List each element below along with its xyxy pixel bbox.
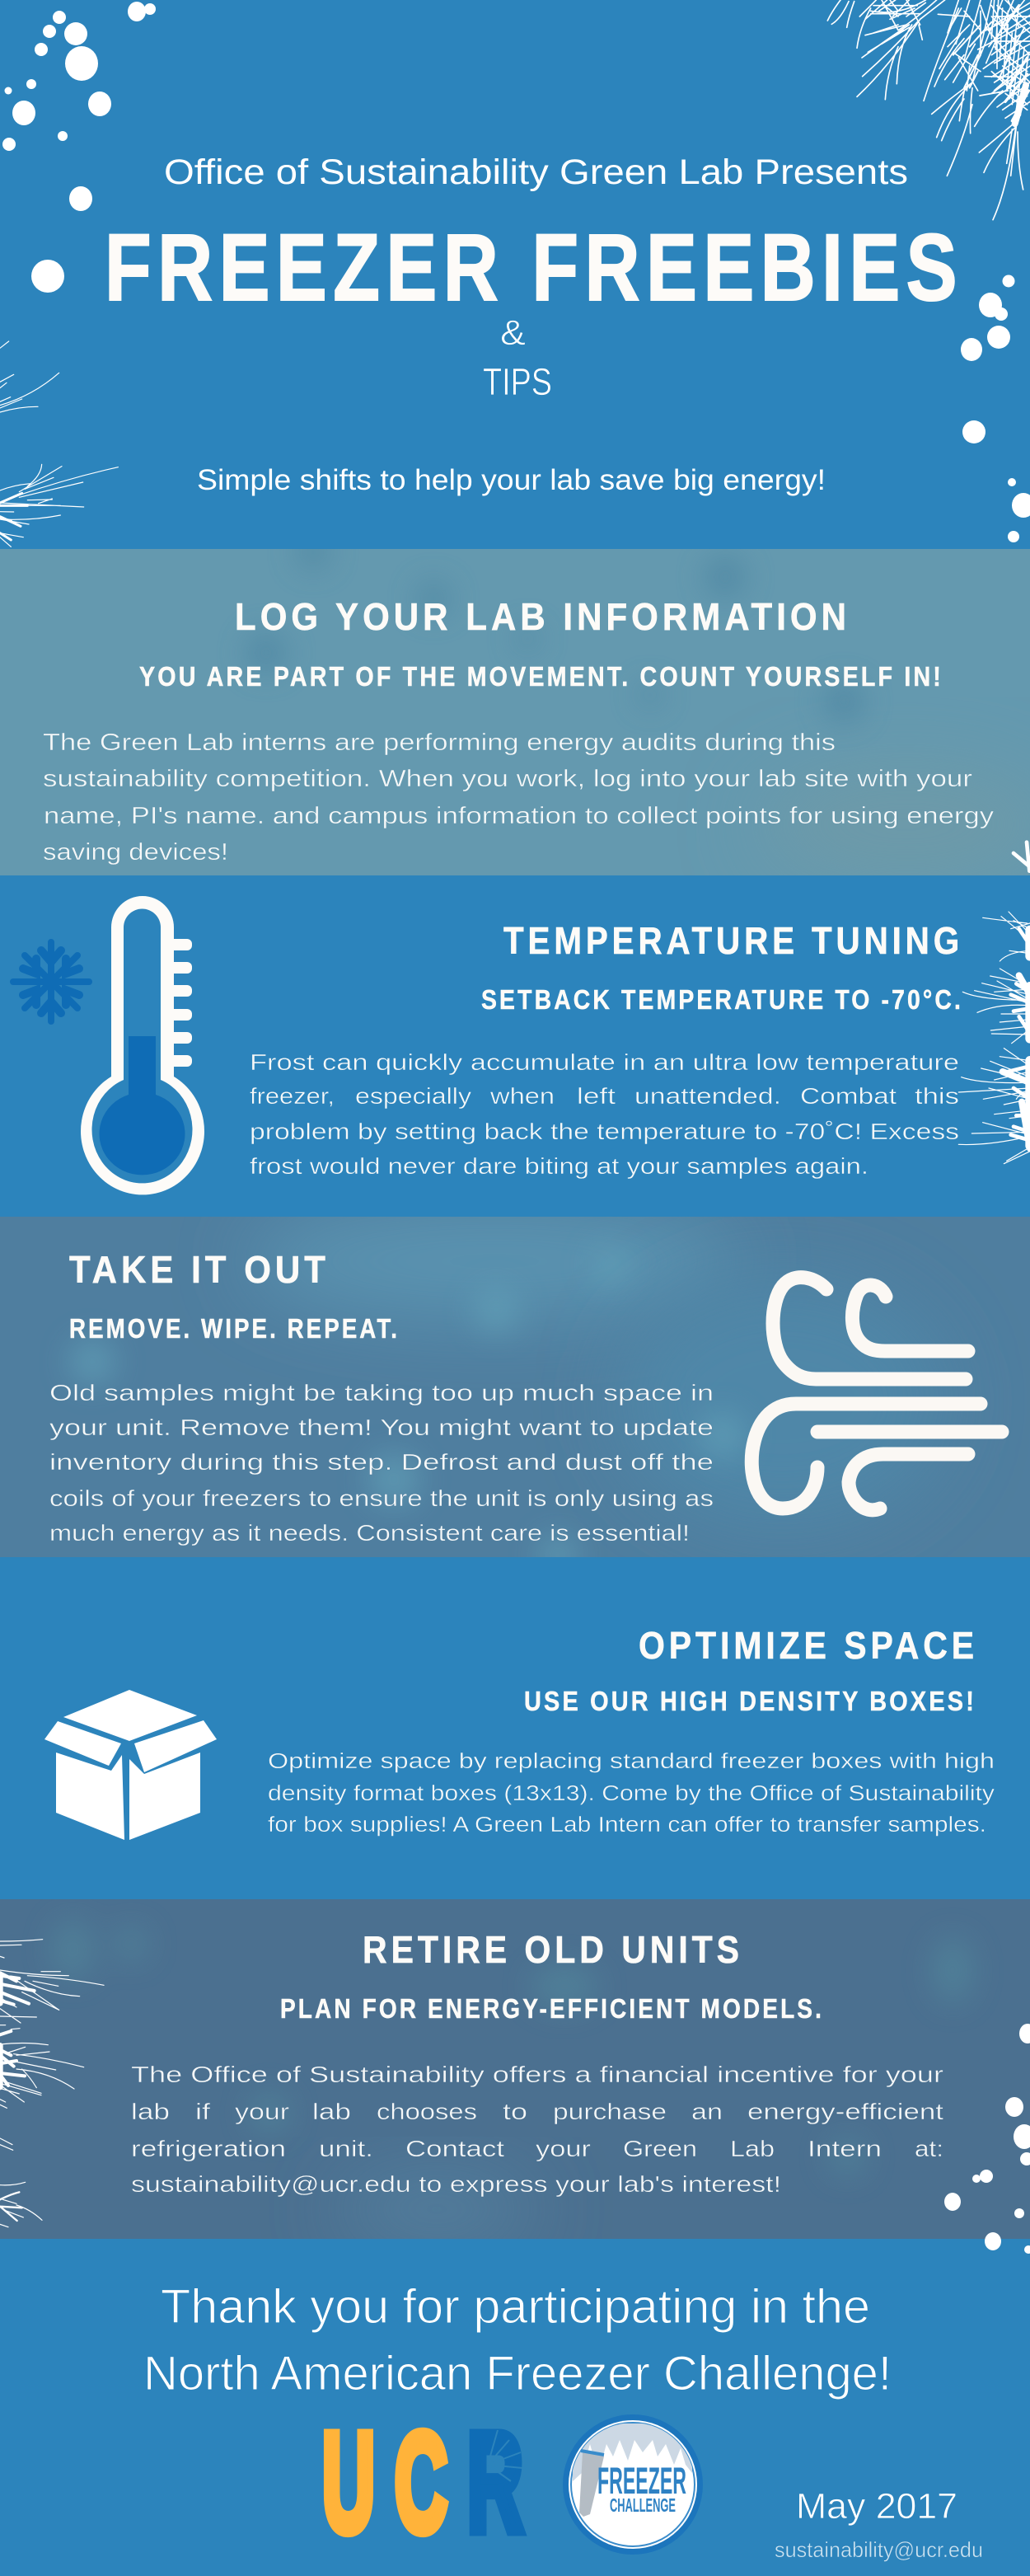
body text: The Green Lab interns are performing energy audits during this [43, 730, 836, 756]
pine branches: left edge [0, 1940, 104, 2227]
subheading: PLAN FOR ENERGY-EFFICIENT MODELS. [280, 1993, 824, 2024]
body text: Optimize space by replacing standard freezer boxes with high [268, 1750, 995, 1773]
body text [131, 2062, 943, 2197]
body text: frost would never dare biting at your samples again. [250, 1153, 868, 1179]
body text: purchase [553, 2099, 667, 2124]
logo: freezer challenge badge: CHALLENGE [610, 2494, 676, 2516]
pine branch: left [0, 341, 118, 547]
body text: coils of your freezers to ensure the unit is only using as [49, 1485, 714, 1511]
body text [49, 1380, 714, 1546]
body text: sustainability competition. When you work, log into your lab site with your [43, 766, 972, 792]
body text: when [489, 1083, 555, 1109]
snow dots: top left [2, 2, 156, 293]
body text: The Office of Sustainability offers a financial incentive for your [131, 2062, 943, 2087]
logo: UCR: C [395, 2405, 447, 2561]
body text: inventory during this step. Defrost and dust off the [49, 1449, 714, 1475]
body text: energy-efficient [747, 2099, 943, 2124]
snow dots: right [961, 275, 1030, 542]
panel: retire old units [0, 1899, 1030, 2254]
icon: snowflake [13, 942, 89, 1021]
body text: unit. [319, 2136, 373, 2161]
panel: take it out [0, 1204, 1030, 1575]
body text: refrigeration [131, 2136, 286, 2161]
body text: Intern [808, 2136, 882, 2161]
pine branches: right edge [958, 842, 1030, 1164]
body text: your unit. Remove them! You might want to update [49, 1415, 714, 1440]
subtitle: presenter: Office of Sustainability Green Lab Presents [164, 152, 908, 192]
body text [250, 1049, 959, 1179]
thank you message: Thank you for participating in the [161, 2280, 870, 2334]
body text: left [577, 1083, 616, 1109]
body text: your [536, 2136, 591, 2161]
icon: thermometer [81, 896, 204, 1194]
body text: problem by setting back the temperature to -70˚C! Excess [250, 1119, 959, 1144]
body text: Green [623, 2136, 697, 2161]
icon: wind [751, 1278, 1002, 1510]
body text [268, 1750, 995, 1837]
heading: LOG YOUR LAB INFORMATION [235, 595, 850, 638]
body text: at: [915, 2136, 943, 2161]
subheading: SETBACK TEMPERATURE TO -70°C. [481, 984, 963, 1015]
tube [579, 2452, 604, 2517]
body text: much energy as it needs. Consistent care is essential! [49, 1520, 690, 1546]
body text: freezer, [250, 1083, 335, 1109]
body text: Combat [800, 1083, 897, 1109]
body text: this [915, 1083, 959, 1109]
body text: saving devices! [43, 839, 228, 866]
logo: UCR [322, 2405, 523, 2561]
logo: UCR: U [322, 2405, 375, 2561]
panel: temperature tuning [13, 842, 1030, 1194]
logo: UCR: R [467, 2405, 523, 2561]
badge wordmark: FREEZER [597, 2460, 686, 2502]
snow dots [944, 2024, 1030, 2254]
body text: for box supplies! A Green Lab Intern can offer to transfer samples. [268, 1814, 986, 1837]
heading: TEMPERATURE TUNING [503, 919, 963, 962]
body text: an [691, 2099, 723, 2124]
body text: name, PI's name. and campus information to collect points for using energy [44, 803, 995, 829]
ampersand: & [500, 313, 526, 353]
body text: Lab [730, 2136, 775, 2161]
contact email: sustainability@ucr.edu [775, 2537, 983, 2562]
icicles [573, 2424, 692, 2481]
thank you message [143, 2280, 892, 2400]
body text: lab [312, 2099, 351, 2124]
heading: RETIRE OLD UNITS [363, 1928, 743, 1971]
body text: lab [131, 2099, 170, 2124]
body text: Contact [405, 2136, 504, 2161]
date: May 2017 [796, 2486, 957, 2527]
logo: freezer challenge badge [563, 2414, 703, 2555]
tips: TIPS [483, 360, 552, 403]
pine branch: top right [827, 0, 1030, 220]
body text: sustainability@ucr.edu to express your lab's interest! [131, 2171, 781, 2197]
body text: if [195, 2099, 210, 2124]
subheading: USE OUR HIGH DENSITY BOXES! [524, 1686, 976, 1716]
heading: OPTIMIZE SPACE [639, 1624, 978, 1667]
body text: chooses [377, 2099, 477, 2124]
body text: your [235, 2099, 289, 2124]
subheading: REMOVE. WIPE. REPEAT. [69, 1313, 400, 1344]
body text: Frost can quickly accumulate in an ultra low temperature [250, 1049, 959, 1075]
heading: TAKE IT OUT [69, 1248, 330, 1291]
icon: box [44, 1690, 217, 1840]
body text: unattended. [634, 1083, 781, 1109]
body text: to [503, 2099, 527, 2124]
body text: density format boxes (13x13). Come by the Office of Sustainability [268, 1782, 995, 1805]
body text: Old samples might be taking too up much space in [49, 1380, 714, 1405]
thank you message: North American Freezer Challenge! [143, 2347, 892, 2400]
panel: footer [143, 2280, 983, 2562]
panel: header [0, 0, 1030, 547]
panel: log your lab information [0, 536, 1030, 882]
body text [43, 730, 995, 866]
body text: especially [355, 1083, 471, 1109]
tagline: Simple shifts to help your lab save big energy! [197, 463, 826, 496]
panel: optimize space [44, 1624, 995, 1840]
